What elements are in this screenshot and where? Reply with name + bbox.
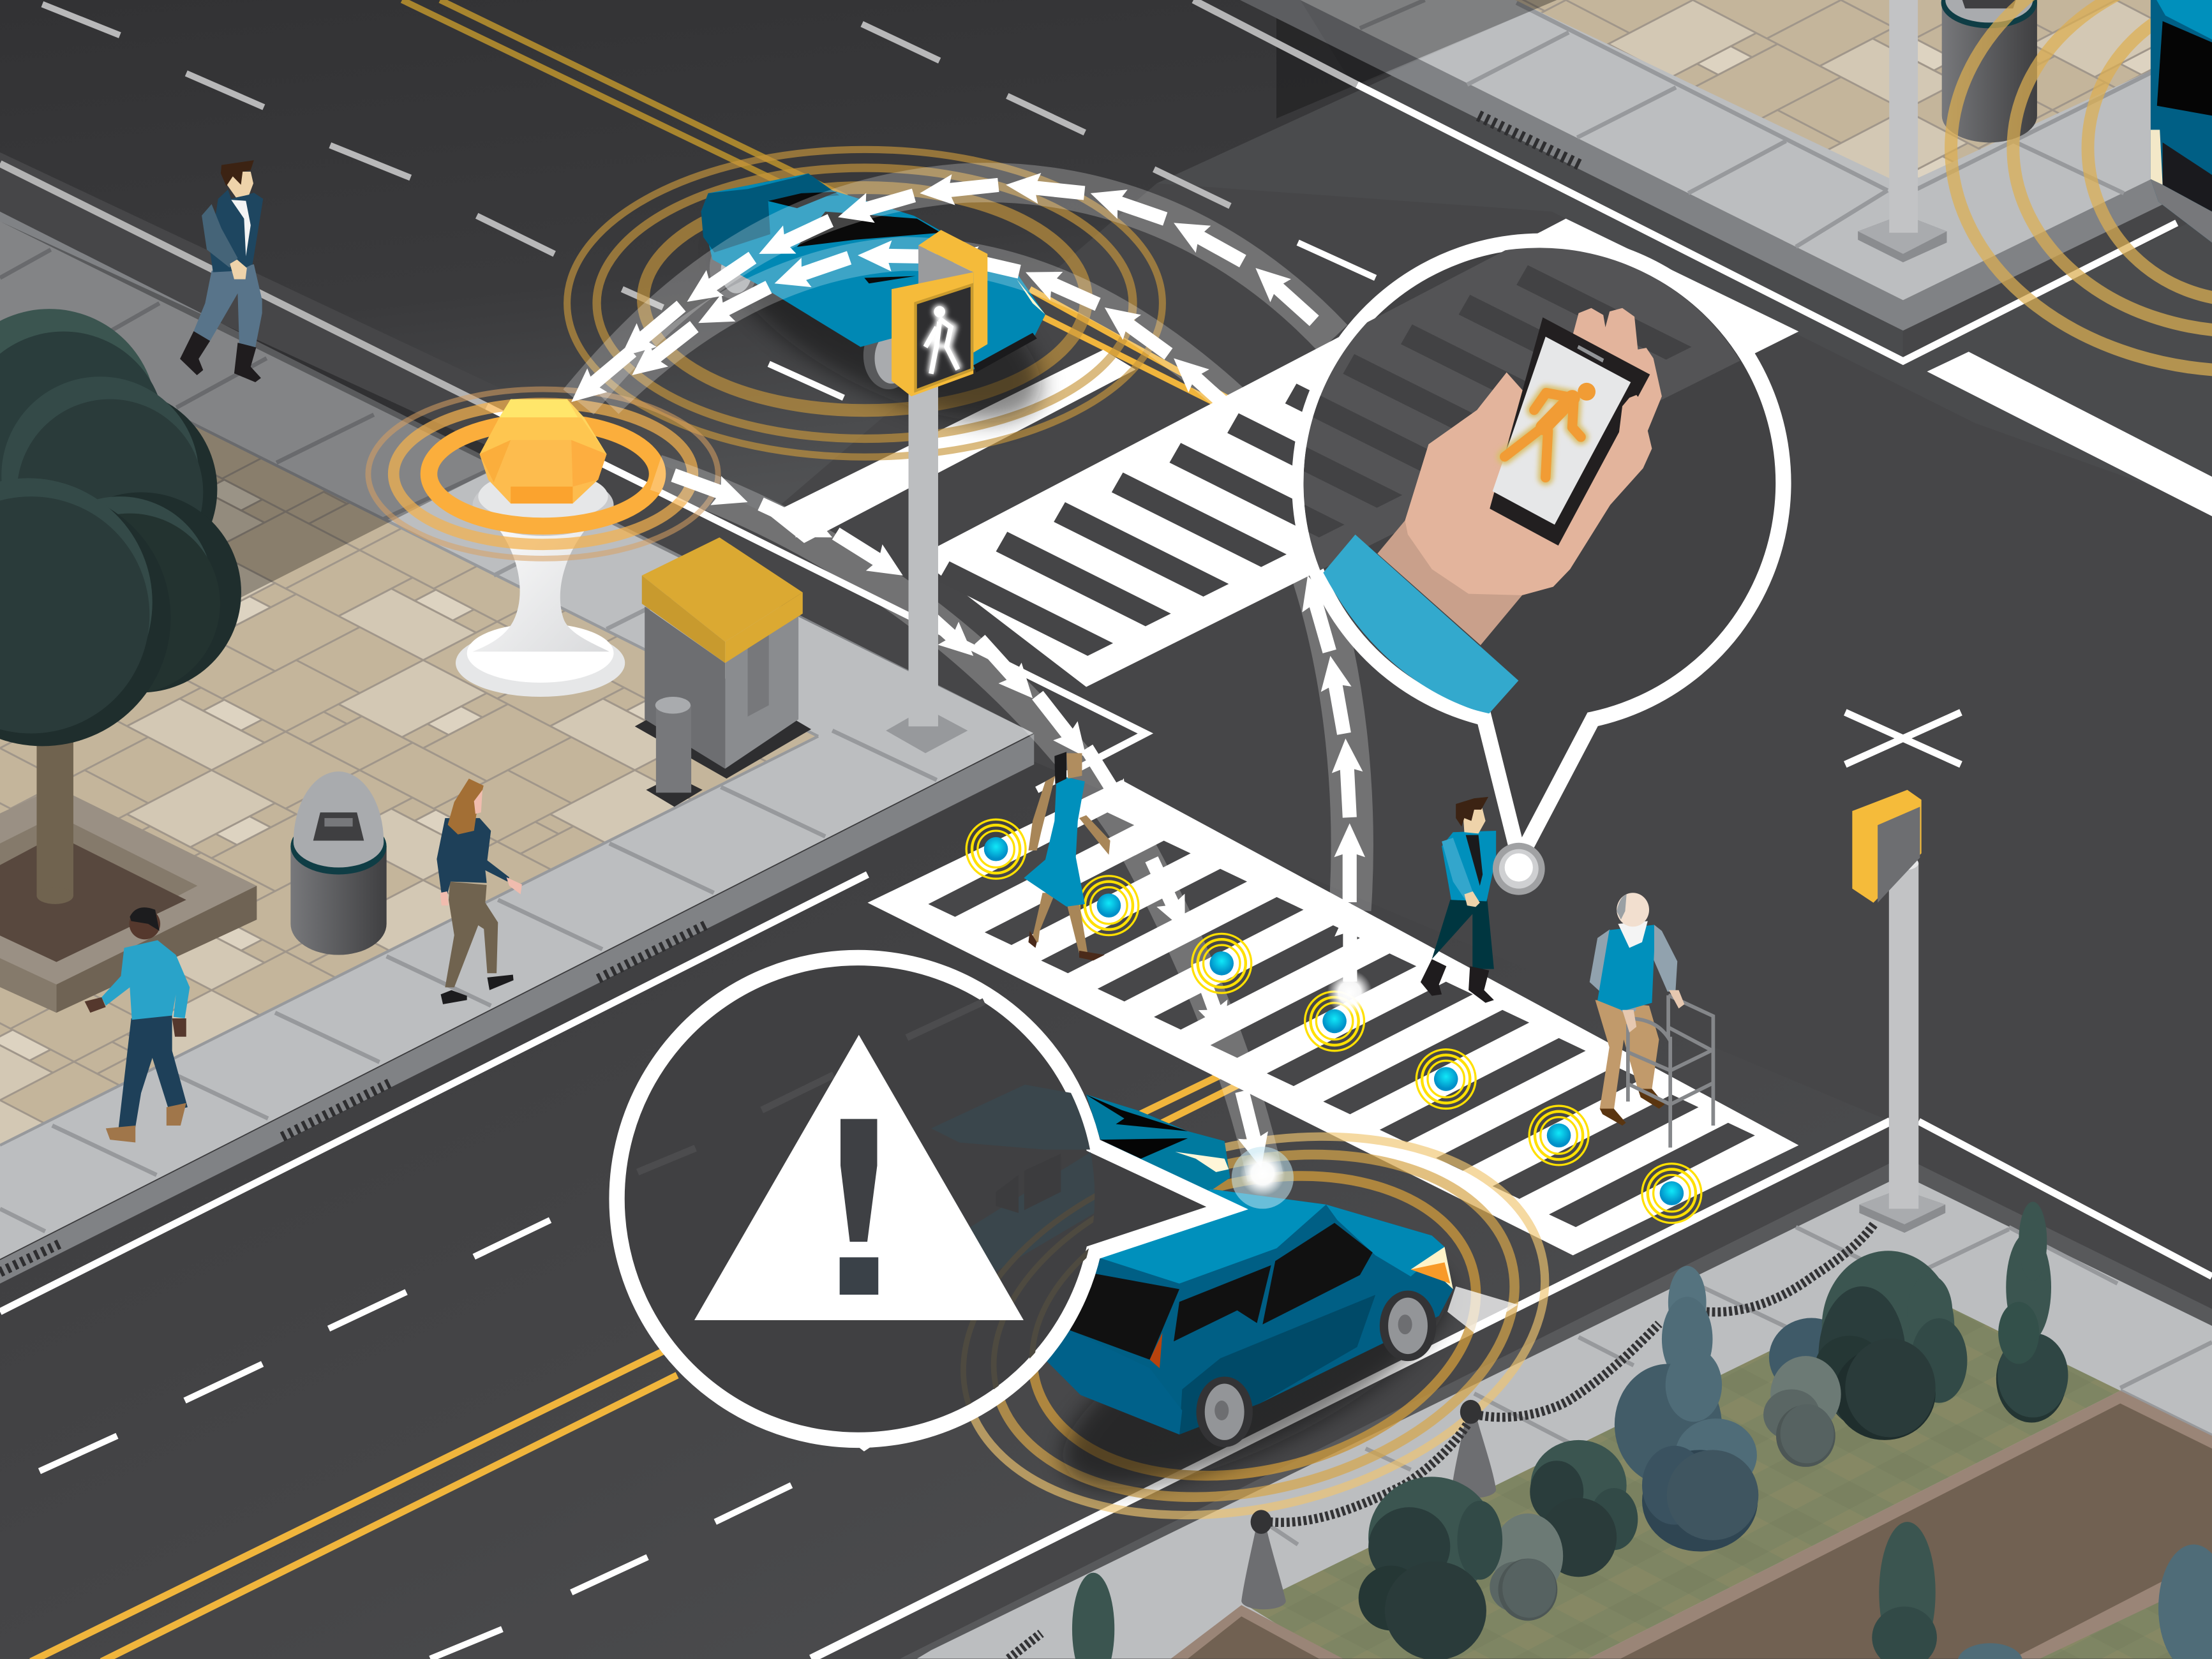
right lamp post with signal xyxy=(1852,790,1945,1233)
control cabinet xyxy=(635,537,811,778)
tree and building shadow on left sidewalk xyxy=(0,221,515,719)
car hood above callout pointer xyxy=(1086,1094,1230,1192)
bollard xyxy=(646,697,703,807)
double yellow centre line lower xyxy=(31,1072,1241,1659)
shrub: bottom-left cypress xyxy=(1072,1573,1114,1659)
top-right vehicle xyxy=(2151,0,2212,242)
callout: warning triangle xyxy=(609,949,1248,1452)
ghost of road and car behind warning callout xyxy=(637,998,1095,1406)
left sidewalk block xyxy=(0,212,1034,1284)
X road marking xyxy=(1845,712,1961,764)
bottom-right sidewalk xyxy=(900,1157,2212,1659)
beacon signal rings xyxy=(368,389,718,558)
shrubs in planting bed xyxy=(1072,1201,2212,1659)
beacon gem xyxy=(480,399,606,503)
person: man in blue jacket on road xyxy=(1421,797,1496,1003)
person: elderly man with walker xyxy=(1590,893,1713,1147)
road markings: thick stop bar top right xyxy=(1927,352,2212,516)
arrows: beacon towards car xyxy=(668,461,1276,1172)
shrub: bottom cypress xyxy=(1872,1522,1937,1659)
arrows: outer arc towards beacon xyxy=(562,169,1325,414)
planting bed xyxy=(1171,1285,2212,1659)
top-right sidewalk with pavers xyxy=(1240,0,2212,331)
shrub: top dark cluster xyxy=(1814,1251,1967,1440)
sleeve xyxy=(1323,535,1518,715)
upper connected car xyxy=(693,172,1070,463)
hand behind phone xyxy=(1405,308,1662,595)
shrub: tall dark cypress right xyxy=(1996,1201,2068,1423)
signal rings around upper car xyxy=(567,149,1162,457)
far stop bar xyxy=(769,350,1135,543)
glow: crosswalk sensor xyxy=(1327,970,1372,1015)
far crosswalk xyxy=(917,219,1798,687)
shrub: grey lower one xyxy=(1490,1514,1563,1621)
shrub: big blue cluster xyxy=(1615,1266,1758,1552)
sensor: crosswalk beacons xyxy=(966,819,1701,1223)
thumb and palm in front of phone xyxy=(1405,373,1507,521)
walking figure on screen xyxy=(1505,393,1581,477)
beacon pedestal xyxy=(456,471,625,697)
shrub: middle dark cluster xyxy=(1530,1440,1638,1577)
top-right lamp post xyxy=(1858,0,1947,262)
double yellow centre line upper xyxy=(402,0,1234,402)
shrub: grey small one xyxy=(1763,1356,1841,1467)
chain barrier with stanchions xyxy=(1008,1223,1875,1659)
shrub: blue-grey behind top dark shrub xyxy=(1769,1318,1854,1397)
person: man in blue sweater left xyxy=(85,907,190,1143)
lower connected car xyxy=(1035,1094,1518,1531)
shrub: bottom blue xyxy=(1957,1643,2022,1659)
arrows: crosswalk towards phone xyxy=(1293,571,1366,982)
callout: phone with pedestrian alert xyxy=(1292,234,1791,847)
person: woman in navy left xyxy=(437,778,522,1004)
trash can left xyxy=(290,771,387,955)
lane dashes lower road xyxy=(40,1220,791,1659)
top-right trash can xyxy=(1941,0,2037,142)
wrist xyxy=(1377,521,1522,645)
person: woman in blue dress on crosswalk xyxy=(1024,752,1110,960)
planter box and tree xyxy=(0,309,257,1013)
phone xyxy=(1490,317,1650,546)
arrows: inner arc towards beacon xyxy=(622,239,1243,422)
lane dashes upper road xyxy=(42,4,1375,398)
arrow band: outer arc xyxy=(578,182,1352,1178)
glow: phone callout tip xyxy=(1493,843,1545,895)
pedestrian signal on pole xyxy=(886,230,987,753)
signal rings around lower car xyxy=(923,1079,1585,1573)
glow: car receiver xyxy=(1232,1147,1294,1209)
person: man in suit top left xyxy=(180,160,263,382)
top-right signal rings xyxy=(1951,0,2212,371)
shrub: lower dark cluster xyxy=(1359,1477,1502,1659)
near crosswalk xyxy=(867,780,1798,1255)
shrub: right blue xyxy=(2158,1545,2212,1659)
storm drains on left curb xyxy=(0,925,705,1272)
